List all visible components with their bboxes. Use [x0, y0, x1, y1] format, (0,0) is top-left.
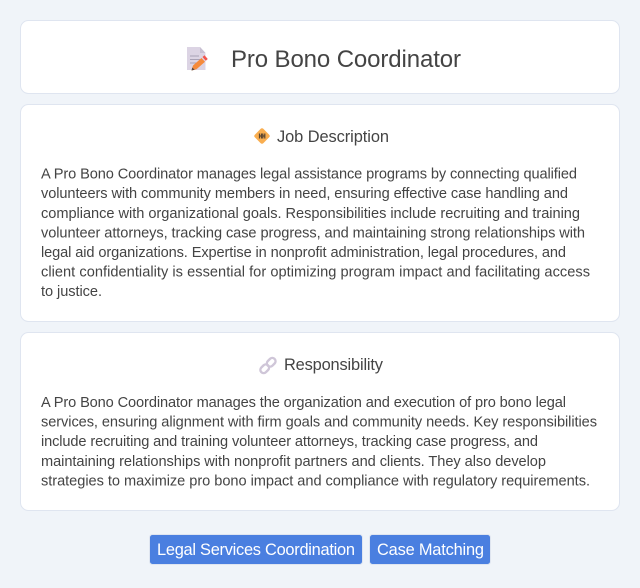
text block: job description — [41, 167, 590, 300]
text block: job description: volunteer attorneys, tracking case progress, and maintaining strong relationships with — [41, 225, 585, 241]
text block: job description: to justice. — [41, 284, 102, 300]
icon: document with pencil — [187, 47, 208, 70]
icon: chain link — [259, 357, 277, 374]
text block: job description: legal aid organizations. Expertise in nonprofit administration, legal procedures, and — [41, 245, 566, 261]
icon: orange diamond — [254, 128, 270, 144]
tag: legal services coordination: Legal Services Coordination — [157, 541, 355, 559]
text block: responsibility: A Pro Bono Coordinator manages the organization and execution of pro bono legal — [41, 395, 566, 411]
panel: responsibility — [20, 332, 620, 510]
text block: job description: A Pro Bono Coordinator manages legal assistance programs by connecting qualified — [41, 167, 577, 183]
text block: responsibility: include recruiting and training volunteer attorneys, tracking case progress, and — [41, 434, 538, 450]
text block: responsibility: strategies to maximize pro bono impact and compliance with regulatory requirements. — [41, 473, 590, 489]
heading: job description: Job Description — [277, 128, 389, 146]
panel: job description — [20, 104, 620, 322]
tag: case matching — [370, 534, 490, 564]
heading: responsibility: Responsibility — [284, 356, 384, 374]
text block: job description: volunteers with community members in need, ensuring effective case handling and — [41, 186, 568, 202]
panel: title — [20, 20, 620, 94]
tag: case matching: Case Matching — [377, 541, 484, 559]
text block: job description: compliance with organizational goals. Responsibilities include recruiting and training — [41, 206, 580, 222]
text block: job description: client confidentiality is essential for optimizing program impact and facilitating access — [41, 265, 590, 281]
text block: responsibility: services, ensuring alignment with firm goals and community needs. Key responsibilities — [41, 415, 597, 431]
text block: responsibility: maintaining relationships with nonprofit partners and clients. They also develop — [41, 454, 546, 470]
tag: legal services coordination — [150, 534, 362, 564]
heading: page title: Pro Bono Coordinator — [231, 46, 461, 73]
text block: responsibility — [41, 395, 597, 489]
